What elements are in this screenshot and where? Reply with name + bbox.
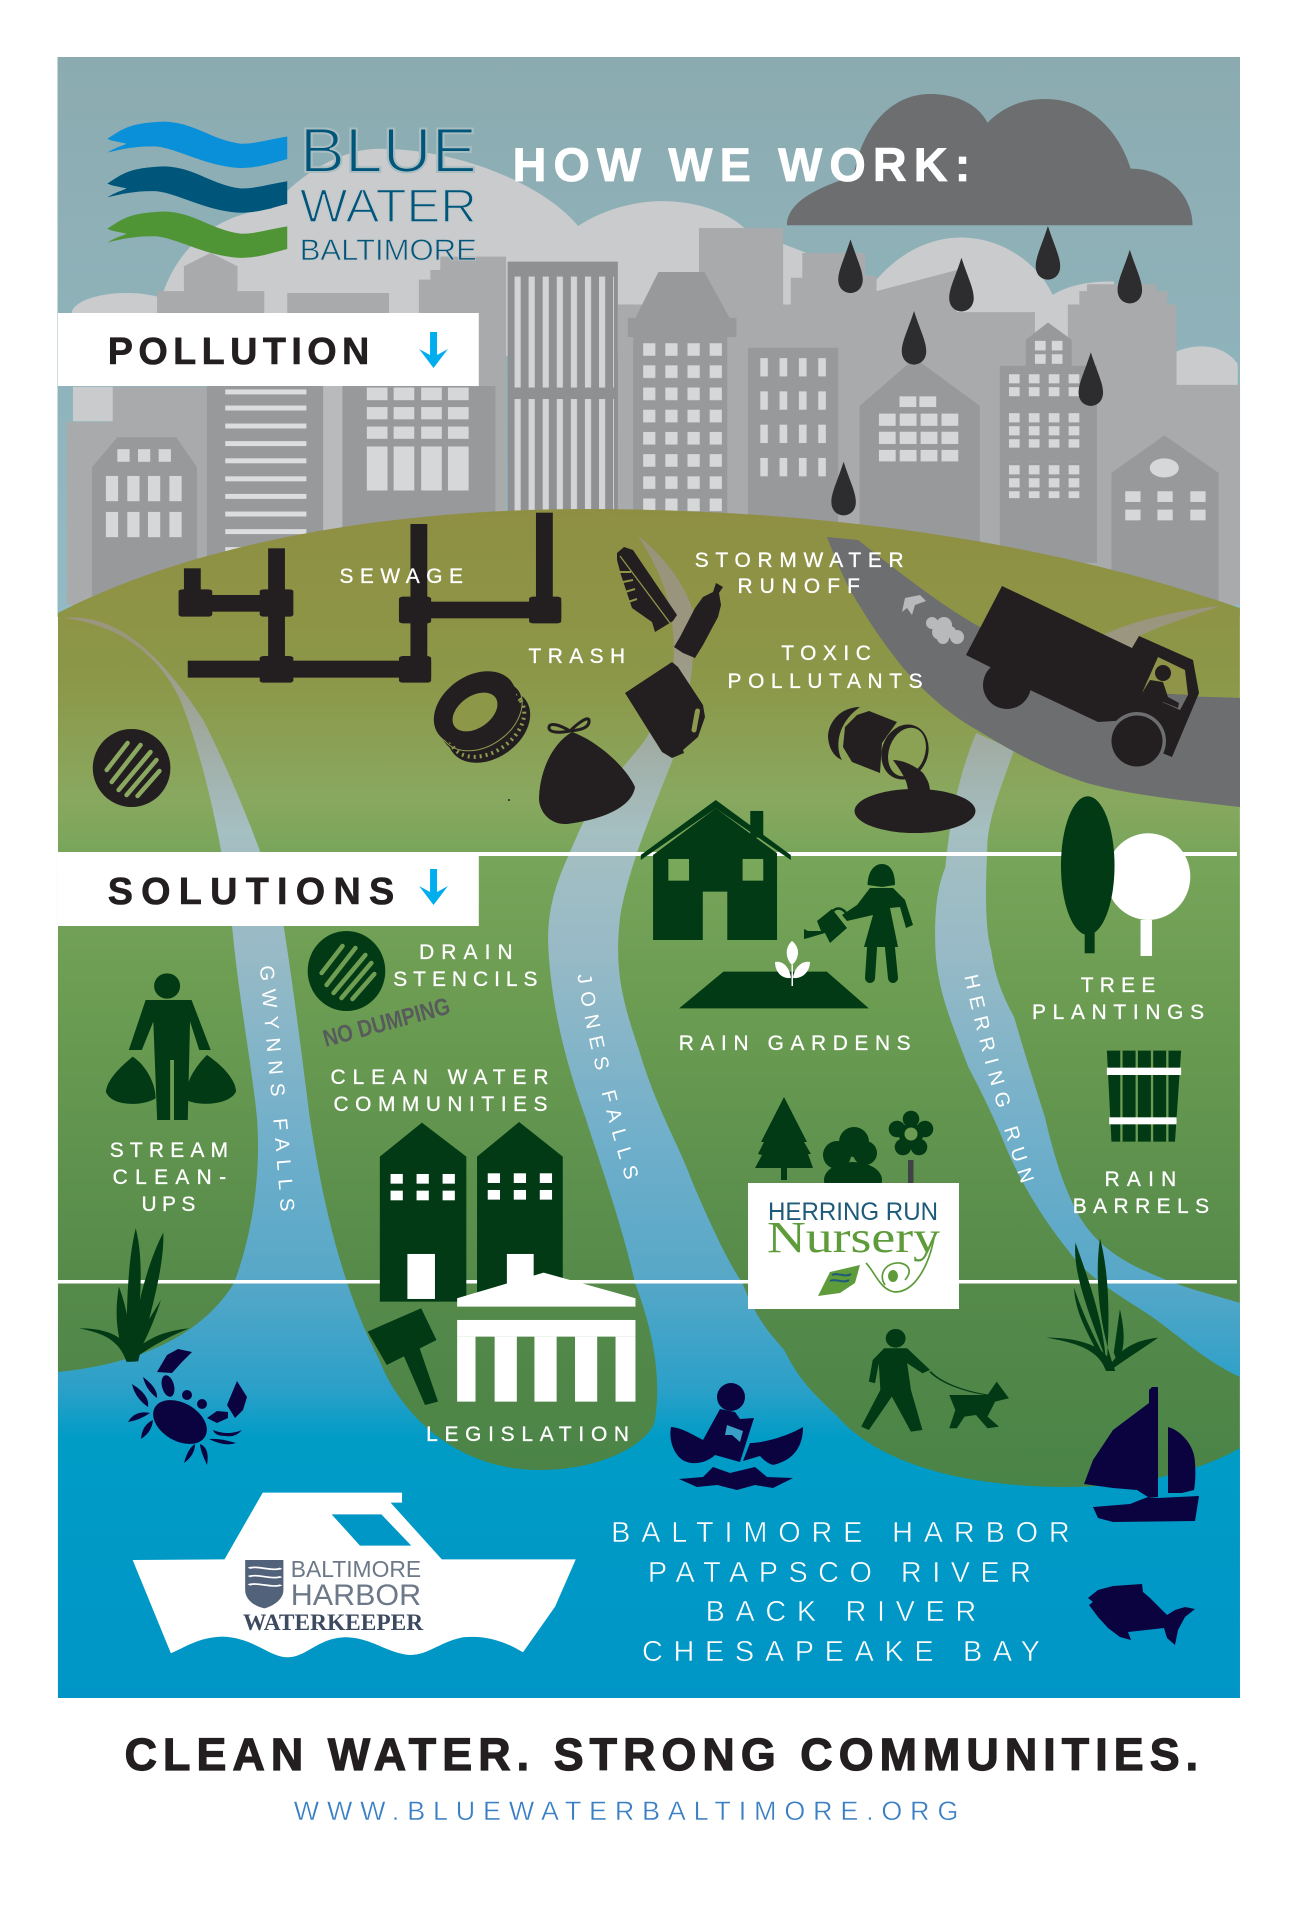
labels: solutions: PLANTINGS xyxy=(1032,1001,1204,1024)
logo: Blue Water Baltimore: BLUE xyxy=(300,116,477,186)
icon: white boat with Waterkeeper logo: HARBOR xyxy=(291,1579,421,1612)
icon: reeds right xyxy=(1046,1238,1158,1371)
icon: white boat with Waterkeeper logo xyxy=(133,1493,576,1657)
labels: solutions xyxy=(110,941,1209,1446)
logo: Blue Water Baltimore: WATER xyxy=(300,180,477,232)
icon: leaf and vine xyxy=(818,1232,935,1296)
illustration: pale clouds behind the city xyxy=(71,149,1238,387)
icon: bottle xyxy=(674,583,723,658)
labels: pollution: POLLUTANTS xyxy=(728,670,923,693)
icon: storm drain xyxy=(93,729,170,807)
heading: solutions: SOLUTIONS xyxy=(108,871,394,913)
icon: house xyxy=(641,800,791,940)
panel: land xyxy=(58,509,1240,1698)
heading: pollution: POLLUTION xyxy=(108,331,369,373)
icon: jug xyxy=(625,662,705,758)
icon: kayaker xyxy=(670,1383,803,1490)
icon: capitol building xyxy=(457,1273,635,1402)
icon: reeds left xyxy=(79,1228,189,1362)
stream labels: JONES FALLS xyxy=(578,974,638,1179)
icon: person walking dog xyxy=(861,1329,1009,1432)
illustration: streams and bay xyxy=(58,510,1240,1698)
icon: rowhouses xyxy=(380,1122,563,1302)
labels: solutions: UPS xyxy=(142,1193,195,1216)
icon: pine tree xyxy=(755,1097,813,1180)
icon: polluted runoff spots xyxy=(902,595,964,644)
stream labels: HERRING RUN xyxy=(964,974,1034,1183)
text: waterways: PATAPSCO RIVER xyxy=(648,1557,1031,1589)
logo: Herring Run Nursery xyxy=(748,1183,959,1309)
icon: dark rain cloud xyxy=(787,94,1193,225)
divider lines xyxy=(58,852,1237,1284)
labels: pollution: RUNOFF xyxy=(737,575,860,598)
panel: sky background xyxy=(58,57,1240,617)
logo: Herring Run Nursery: HERRING RUN xyxy=(768,1198,938,1226)
labels: pollution: STORMWATER xyxy=(695,549,904,572)
labels: solutions: CLEAN WATER xyxy=(331,1066,548,1089)
labels: pollution: TRASH xyxy=(529,645,625,668)
labels: solutions: LEGISLATION xyxy=(426,1423,629,1446)
icon: white boat with Waterkeeper logo: BALTIMORE xyxy=(291,1556,421,1582)
illustration: road xyxy=(827,537,1240,807)
labels: solutions: CLEAN- xyxy=(113,1166,226,1189)
icon: shoe xyxy=(617,547,677,632)
icon: dump truck xyxy=(966,586,1199,770)
icon: sewage pipes xyxy=(179,513,561,683)
icon: spilled barrel xyxy=(828,707,976,833)
icon: sailboat xyxy=(1084,1387,1199,1522)
heading: solutions xyxy=(58,852,479,926)
illustration: dirty stream branch behind truck xyxy=(1103,606,1220,650)
icon: gavel xyxy=(368,1308,438,1405)
icon: rain drops xyxy=(831,226,1142,515)
text: waterways: BACK RIVER xyxy=(706,1596,976,1628)
icon: rain garden bed xyxy=(679,941,869,1008)
back buildings xyxy=(67,228,1240,605)
icon: drain stencil xyxy=(308,931,385,1011)
icon: rain barrel xyxy=(1107,1051,1181,1142)
labels: solutions: BARRELS xyxy=(1073,1195,1209,1218)
windows and stripes xyxy=(225,389,306,552)
icon: person with bags xyxy=(106,973,236,1120)
illustration: city skyline xyxy=(67,228,1240,609)
labels: solutions: TREE xyxy=(1081,974,1155,997)
icon: white boat with Waterkeeper logo: WATERKEEPER xyxy=(243,1610,424,1635)
stream labels xyxy=(260,966,1034,1211)
labels: pollution: SEWAGE xyxy=(340,565,463,588)
labels: solutions: STENCILS xyxy=(393,968,538,991)
text: waterways: CHESAPEAKE BAY xyxy=(642,1636,1040,1668)
logo: Blue Water Baltimore xyxy=(107,116,477,267)
label: no dumping: NO DUMPING xyxy=(320,993,453,1053)
labels: solutions: DRAIN xyxy=(419,941,513,964)
labels: pollution: TOXIC xyxy=(781,642,871,665)
logo: Herring Run Nursery: Nursery xyxy=(767,1213,940,1262)
icon: woman watering xyxy=(804,864,913,978)
labels: solutions: RAIN xyxy=(1105,1168,1176,1191)
tagline: CLEAN WATER. STRONG COMMUNITIES. xyxy=(125,1729,1198,1780)
title: HOW WE WORK: xyxy=(513,139,970,191)
icon: logo waves xyxy=(107,122,287,258)
icon: crab xyxy=(128,1349,247,1465)
labels: solutions: COMMUNITIES xyxy=(334,1093,547,1116)
labels: solutions: STREAM xyxy=(110,1139,228,1162)
labels: solutions: RAIN GARDENS xyxy=(679,1032,911,1055)
icon: flower xyxy=(889,1111,933,1184)
icon: trash bag xyxy=(508,719,635,824)
icon: tire xyxy=(420,656,544,778)
icon: bush xyxy=(823,1127,882,1198)
icon: trees xyxy=(1061,796,1190,956)
website url: WWW.BLUEWATERBALTIMORE.ORG xyxy=(294,1796,958,1826)
heading: pollution xyxy=(58,313,479,386)
front buildings xyxy=(92,272,1219,609)
icon: fish xyxy=(1088,1584,1195,1645)
labels: pollution xyxy=(340,549,923,693)
text: waterways xyxy=(611,1517,1070,1668)
stream labels: GWYNNS FALLS xyxy=(260,966,294,1211)
text: waterways: BALTIMORE HARBOR xyxy=(611,1517,1070,1549)
logo: Blue Water Baltimore: BALTIMORE xyxy=(300,234,477,267)
